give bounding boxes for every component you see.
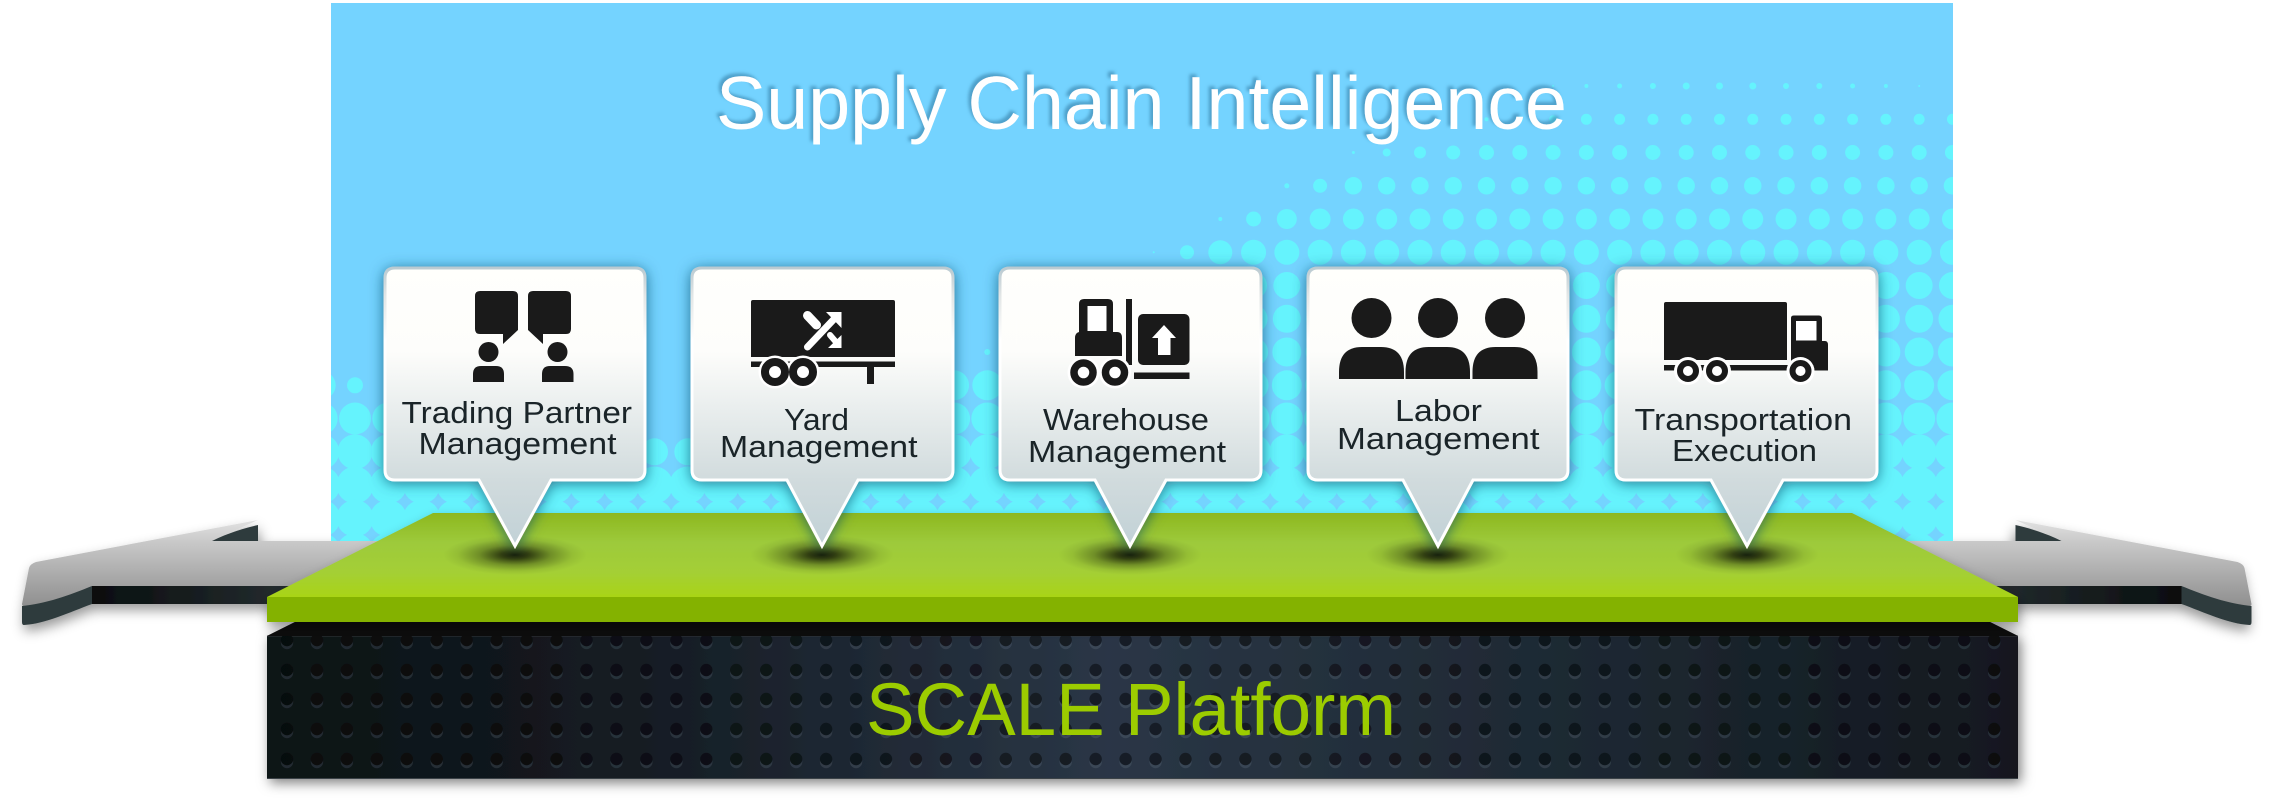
label	[402, 395, 632, 461]
label: Management	[1337, 421, 1540, 456]
platform base: dark perforated block	[267, 622, 2018, 779]
perforation hole base	[287, 640, 2006, 759]
label	[720, 402, 918, 464]
card: Warehouse Management	[1000, 268, 1261, 546]
pointer shadows on platform	[443, 535, 1819, 575]
perforation holes	[287, 640, 2006, 759]
label	[1028, 402, 1226, 469]
label	[1337, 393, 1540, 456]
icon: two people with speech bubbles	[473, 291, 574, 382]
label: Management	[418, 426, 617, 461]
icon: yard trailer	[751, 300, 895, 388]
card: Transportation Execution	[1616, 268, 1877, 546]
panel: supply chain intelligence background	[308, 3, 1953, 552]
card: Yard Management	[692, 268, 953, 546]
title: Supply Chain Intelligence	[716, 61, 1567, 145]
right arrow	[1884, 520, 2252, 625]
label: Trading Partner	[402, 395, 632, 430]
icon: delivery truck	[1664, 302, 1828, 385]
card: Trading Partner Management	[385, 268, 645, 546]
label: Yard	[784, 402, 849, 437]
platform label: SCALE Platform	[866, 668, 1396, 751]
label: Warehouse	[1043, 402, 1209, 437]
left arrow	[22, 520, 390, 625]
card: Labor Management	[1308, 268, 1568, 546]
label: Execution	[1672, 433, 1817, 468]
perforation highlights	[287, 643, 2006, 762]
label: Transportation	[1634, 402, 1852, 437]
halftone dot pattern	[308, 82, 1953, 552]
label: Labor	[1395, 393, 1482, 428]
label: Management	[720, 429, 918, 464]
icon: forklift with box	[1068, 299, 1190, 388]
label	[1634, 402, 1852, 468]
label: Management	[1028, 434, 1226, 469]
green platform slab	[267, 513, 2018, 622]
icon: three people	[1339, 298, 1538, 379]
